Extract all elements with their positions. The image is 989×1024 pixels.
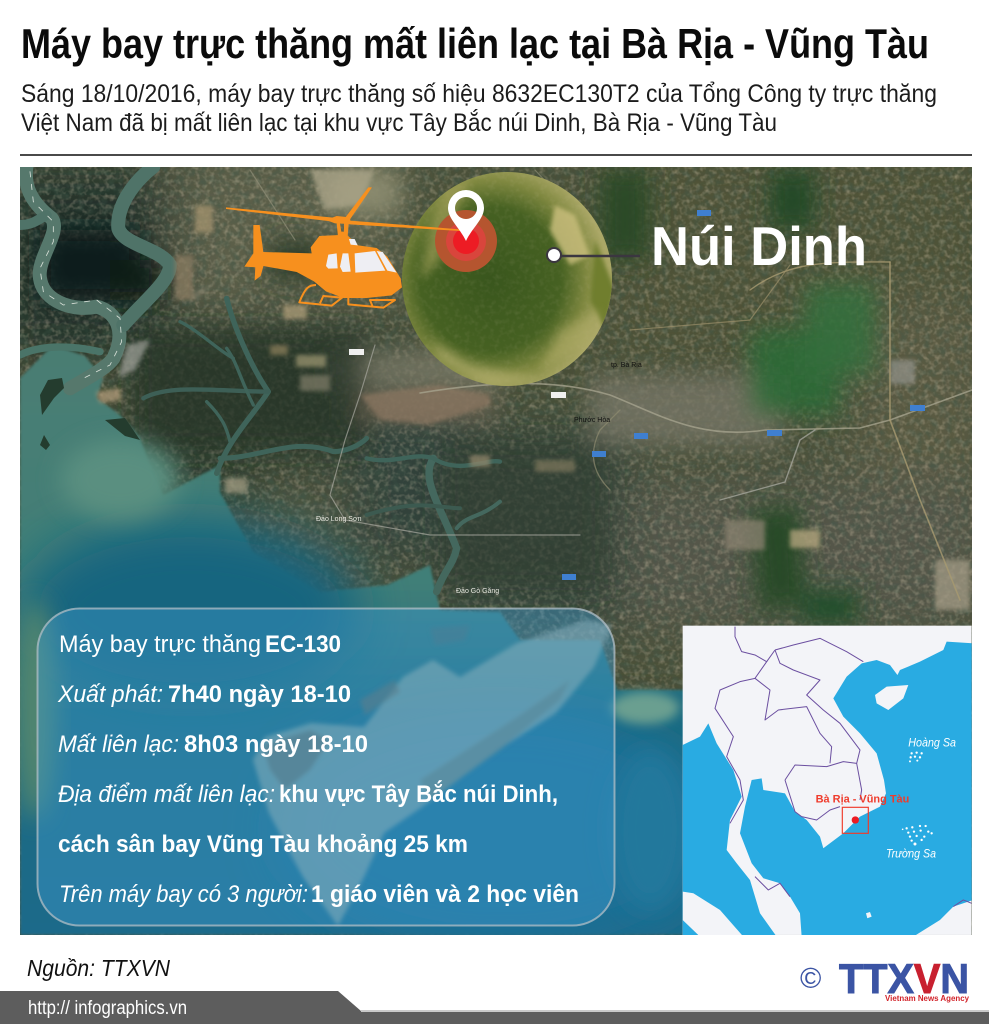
land clearings <box>96 170 970 610</box>
islands <box>40 378 140 450</box>
detail: location: khu vực Tây Bắc núi Dinh, <box>279 780 558 808</box>
icon: location pin <box>448 190 484 241</box>
rivers <box>20 165 500 592</box>
sea <box>740 642 973 937</box>
detail: people on board: Trên máy bay có 3 người: <box>59 881 308 908</box>
detail: departure <box>57 681 351 708</box>
texture <box>20 167 972 935</box>
detail: contact lost <box>58 731 368 758</box>
label: Trường Sa: Trường Sa <box>886 847 936 861</box>
province marker: Bà Rịa - Vũng Tàu <box>816 793 909 805</box>
footer bar <box>0 991 989 1024</box>
label: Hoàng Sa: Hoàng Sa <box>908 736 956 750</box>
label: Trường Sa <box>886 825 936 861</box>
label: Núi Dinh <box>547 215 867 277</box>
map labels: Phước Hòa <box>574 417 610 424</box>
detail: people on board <box>59 881 579 908</box>
detail: aircraft type: EC-130 <box>265 631 341 658</box>
province marker <box>816 793 909 833</box>
detail: location: cách sân bay Vũng Tàu khoảng 25 km <box>58 831 468 858</box>
logo: TTXVN: Vietnam News Agency <box>885 993 969 1003</box>
inset locator map <box>683 626 973 937</box>
detail: location <box>58 780 558 858</box>
detail: people on board: 1 giáo viên và 2 học viên <box>311 881 579 908</box>
islands <box>683 892 743 937</box>
detail: departure: 7h40 ngày 18-10 <box>168 681 351 708</box>
roads <box>250 170 972 600</box>
borders <box>715 627 972 907</box>
intro text: Việt Nam đã bị mất liên lạc tại khu vực Tây Bắc núi Dinh, Bà Rịa - Vũng Tàu <box>21 108 777 137</box>
logo: TTXVN: TTXVN <box>839 955 969 1002</box>
sea <box>20 345 690 935</box>
panel: flight details <box>37 608 615 926</box>
logo: TTXVN: © <box>800 963 821 995</box>
map labels: tp. Bà Rịa <box>611 362 642 369</box>
detail: departure: Xuất phát: <box>57 681 163 708</box>
detail: location: Địa điểm mất liên lạc: <box>58 781 275 808</box>
panel: satellite map <box>0 147 989 950</box>
source: Nguồn: TTXVN <box>27 955 170 981</box>
label: Núi Dinh: Núi Dinh <box>651 215 867 277</box>
núi Dinh highlighted circle <box>402 172 612 386</box>
detail: contact lost: 8h03 ngày 18-10 <box>184 731 368 758</box>
intro text <box>21 80 937 137</box>
map labels: Đảo Gò Găng <box>456 588 499 595</box>
footer bar: http:// infographics.vn <box>28 998 187 1019</box>
label: Hoàng Sa <box>908 736 956 762</box>
peninsula <box>253 620 612 926</box>
map labels: Đảo Long Sơn <box>316 516 362 523</box>
detail: aircraft type: Máy bay trực thăng <box>59 631 261 658</box>
map labels <box>316 362 642 595</box>
icon: helicopter <box>226 187 460 308</box>
callout: red crash target <box>435 210 497 272</box>
detail: contact lost: Mất liên lạc: <box>58 731 179 758</box>
